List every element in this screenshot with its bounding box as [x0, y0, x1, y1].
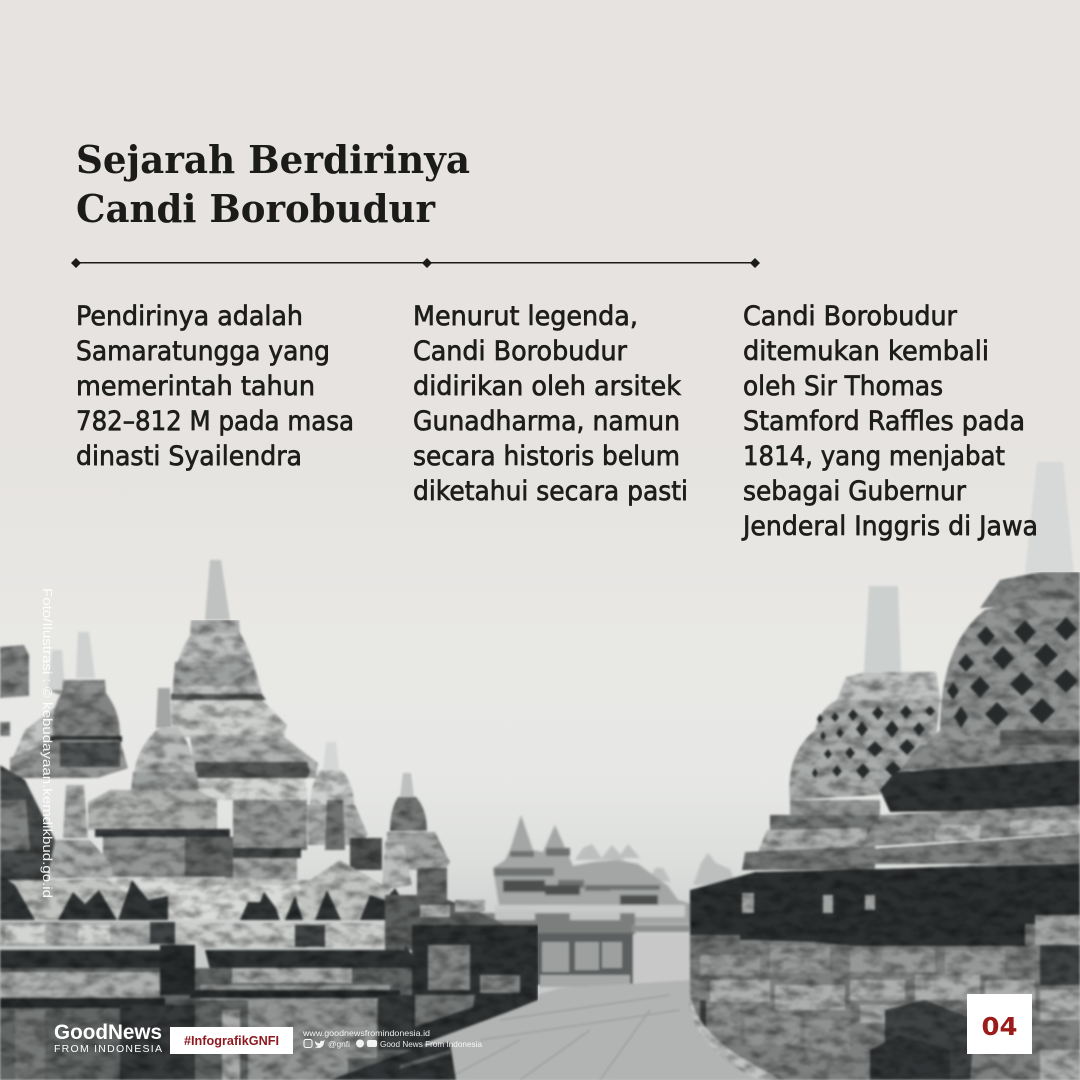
ledge with foliage — [480, 913, 635, 935]
left edge rocks — [0, 765, 55, 890]
text column 3 — [741, 301, 1038, 542]
spire: front stupa — [156, 688, 172, 728]
stupa: main tall — [170, 620, 318, 883]
text column 2 — [413, 301, 688, 507]
stupa: fourth — [350, 797, 450, 902]
hashtag badge: #InfografikGNFI — [184, 1034, 279, 1048]
stupa: front right with lattice — [850, 572, 1080, 864]
spire: middle stupa — [323, 742, 339, 770]
icon: twitter — [315, 1040, 325, 1048]
title: Sejarah Berdirinya — [76, 137, 470, 182]
title: Candi Borobudur — [76, 186, 436, 231]
text column 2: diketahui secara pasti — [413, 476, 688, 507]
logo: GoodNews From Indonesia: FROM INDONESIA — [54, 1043, 162, 1055]
text column 1: memerintah tahun — [76, 371, 315, 402]
text column 2: Menurut legenda, — [413, 301, 638, 332]
website and social handles — [302, 1028, 482, 1049]
photo: right stupas and wall — [688, 572, 1080, 1080]
text column 2: secara historis belum — [413, 441, 680, 472]
photo: left temple terraces — [0, 620, 538, 1080]
text column 3: sebagai Gubernur — [743, 476, 966, 507]
page number badge: 04 — [982, 1012, 1018, 1041]
lower wall — [0, 968, 425, 1080]
spire: back right — [864, 586, 901, 672]
divider with diamonds — [71, 258, 760, 268]
light coping band — [0, 922, 175, 946]
text column 1: 782–812 M pada masa — [76, 406, 354, 437]
text column 1: dinasti Syailendra — [76, 441, 302, 472]
text column 3: oleh Sir Thomas — [743, 371, 943, 402]
text column 1 — [76, 301, 354, 472]
icon: facebook — [356, 1040, 364, 1048]
logo: GoodNews From Indonesia — [54, 1021, 162, 1055]
dark foliage — [0, 875, 415, 920]
terrace ledge with foliage — [0, 860, 400, 920]
stone block — [0, 645, 29, 736]
terrace foliage mid — [385, 895, 505, 950]
wall panels — [412, 925, 538, 1050]
logo: GoodNews From Indonesia: GoodNews — [54, 1021, 162, 1044]
text column 1: Pendirinya adalah — [76, 301, 303, 332]
stupa: second on left — [10, 680, 128, 778]
spire: far left — [48, 650, 65, 690]
text column 1: Samaratungga yang — [76, 336, 330, 367]
text column 2: Gunadharma, namun — [413, 406, 680, 437]
text column 3: Stamford Raffles pada — [743, 406, 1025, 437]
website and social handles: Good News From Indonesia — [380, 1039, 482, 1049]
stupa: back right with lattice — [742, 672, 941, 870]
photo: distant stupas — [480, 815, 736, 935]
text column 3: Candi Borobudur — [743, 301, 957, 332]
stupa: middle pale — [307, 770, 368, 850]
page number badge — [967, 994, 1032, 1054]
text column 3: 1814, yang menjabat — [743, 441, 1005, 472]
stairs at foot — [330, 1042, 456, 1080]
photo: right spires — [864, 462, 1074, 672]
spire: fourth stupa — [400, 773, 414, 797]
website and social handles: www.goodnewsfromindonesia.id — [302, 1028, 430, 1038]
photo: left spires — [48, 560, 414, 797]
hashtag badge — [170, 1027, 293, 1054]
circular stone wall — [690, 860, 1080, 1080]
stupa cluster — [493, 815, 692, 924]
icon: instagram — [304, 1040, 312, 1048]
text column 2: didirikan oleh arsitek — [413, 371, 682, 402]
website and social handles: @gnfi — [328, 1039, 350, 1049]
stupa: far left background — [12, 690, 72, 760]
stone obelisk — [50, 785, 112, 878]
text column 3: Jenderal Inggris di Jawa — [741, 511, 1038, 542]
dark cornice — [0, 945, 420, 970]
spire: main stupa — [205, 560, 230, 620]
photo credit: Foto/Ilustrasi : © kebudayaan.kemdikbud.go.id — [40, 588, 54, 898]
photo: far wall and walkway — [430, 933, 780, 1080]
icon: youtube — [367, 1040, 377, 1047]
spire: second stupa — [76, 632, 95, 678]
text column 3: ditemukan kembali — [743, 336, 989, 367]
title — [76, 137, 470, 231]
stupa: front small — [88, 727, 233, 877]
spire: front right — [1025, 462, 1074, 573]
photo: lattice openings — [812, 617, 1078, 779]
text column 2: Candi Borobudur — [413, 336, 627, 367]
faint rear stupas — [575, 844, 736, 885]
